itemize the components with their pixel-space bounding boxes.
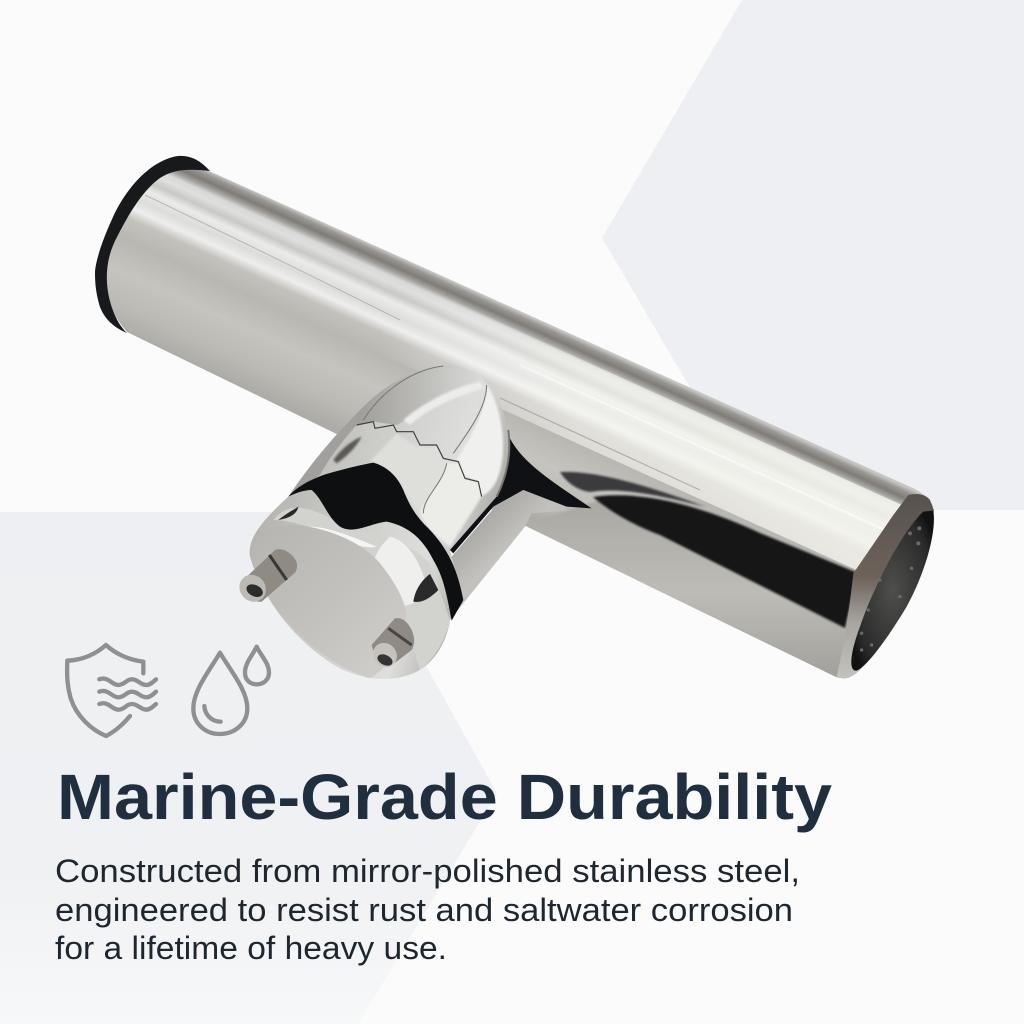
body line 3: for a lifetime of heavy use.	[55, 930, 447, 966]
body line 2: engineered to resist rust and saltwater corrosion	[55, 892, 793, 928]
tube end cap with drainage holes	[837, 494, 934, 678]
background hexagon: top right	[602, 0, 1024, 510]
dome dark reflection	[333, 437, 362, 463]
lower dome highlight	[420, 463, 482, 547]
dome top section	[357, 365, 487, 425]
rim dark reflection	[413, 574, 438, 602]
title: Marine-Grade Durability	[57, 761, 832, 833]
junction flange	[452, 490, 567, 603]
body line 1: Constructed from mirror-polished stainless steel,	[55, 853, 800, 889]
rubber band and cavity	[288, 463, 463, 621]
icon: water drops	[193, 647, 269, 734]
front rim reflections	[273, 508, 450, 670]
dome edge shade	[497, 430, 509, 497]
dome top highlight	[403, 382, 483, 425]
product photo: stainless steel rod holder	[95, 156, 934, 679]
body text	[55, 853, 800, 966]
dome centre panel	[370, 433, 447, 513]
rim bright patch	[373, 537, 430, 607]
collar body	[250, 365, 509, 679]
zig-zag seam	[357, 422, 482, 497]
dome right highlight	[457, 385, 503, 497]
mounting face plate	[250, 525, 407, 678]
icon: shield with waves	[67, 645, 156, 736]
background hexagon: bottom left	[0, 512, 497, 1024]
dome left shadow	[288, 407, 373, 497]
seam curves	[363, 366, 487, 513]
black rubber ring on tube end	[95, 156, 210, 333]
junction black reflection	[447, 438, 592, 553]
socket bolt: left	[234, 549, 297, 607]
main tube	[106, 170, 934, 678]
rim dark notch	[278, 507, 298, 520]
socket bolt: right	[368, 618, 414, 672]
clamp collar	[234, 365, 592, 679]
rim bright strip	[310, 527, 377, 547]
